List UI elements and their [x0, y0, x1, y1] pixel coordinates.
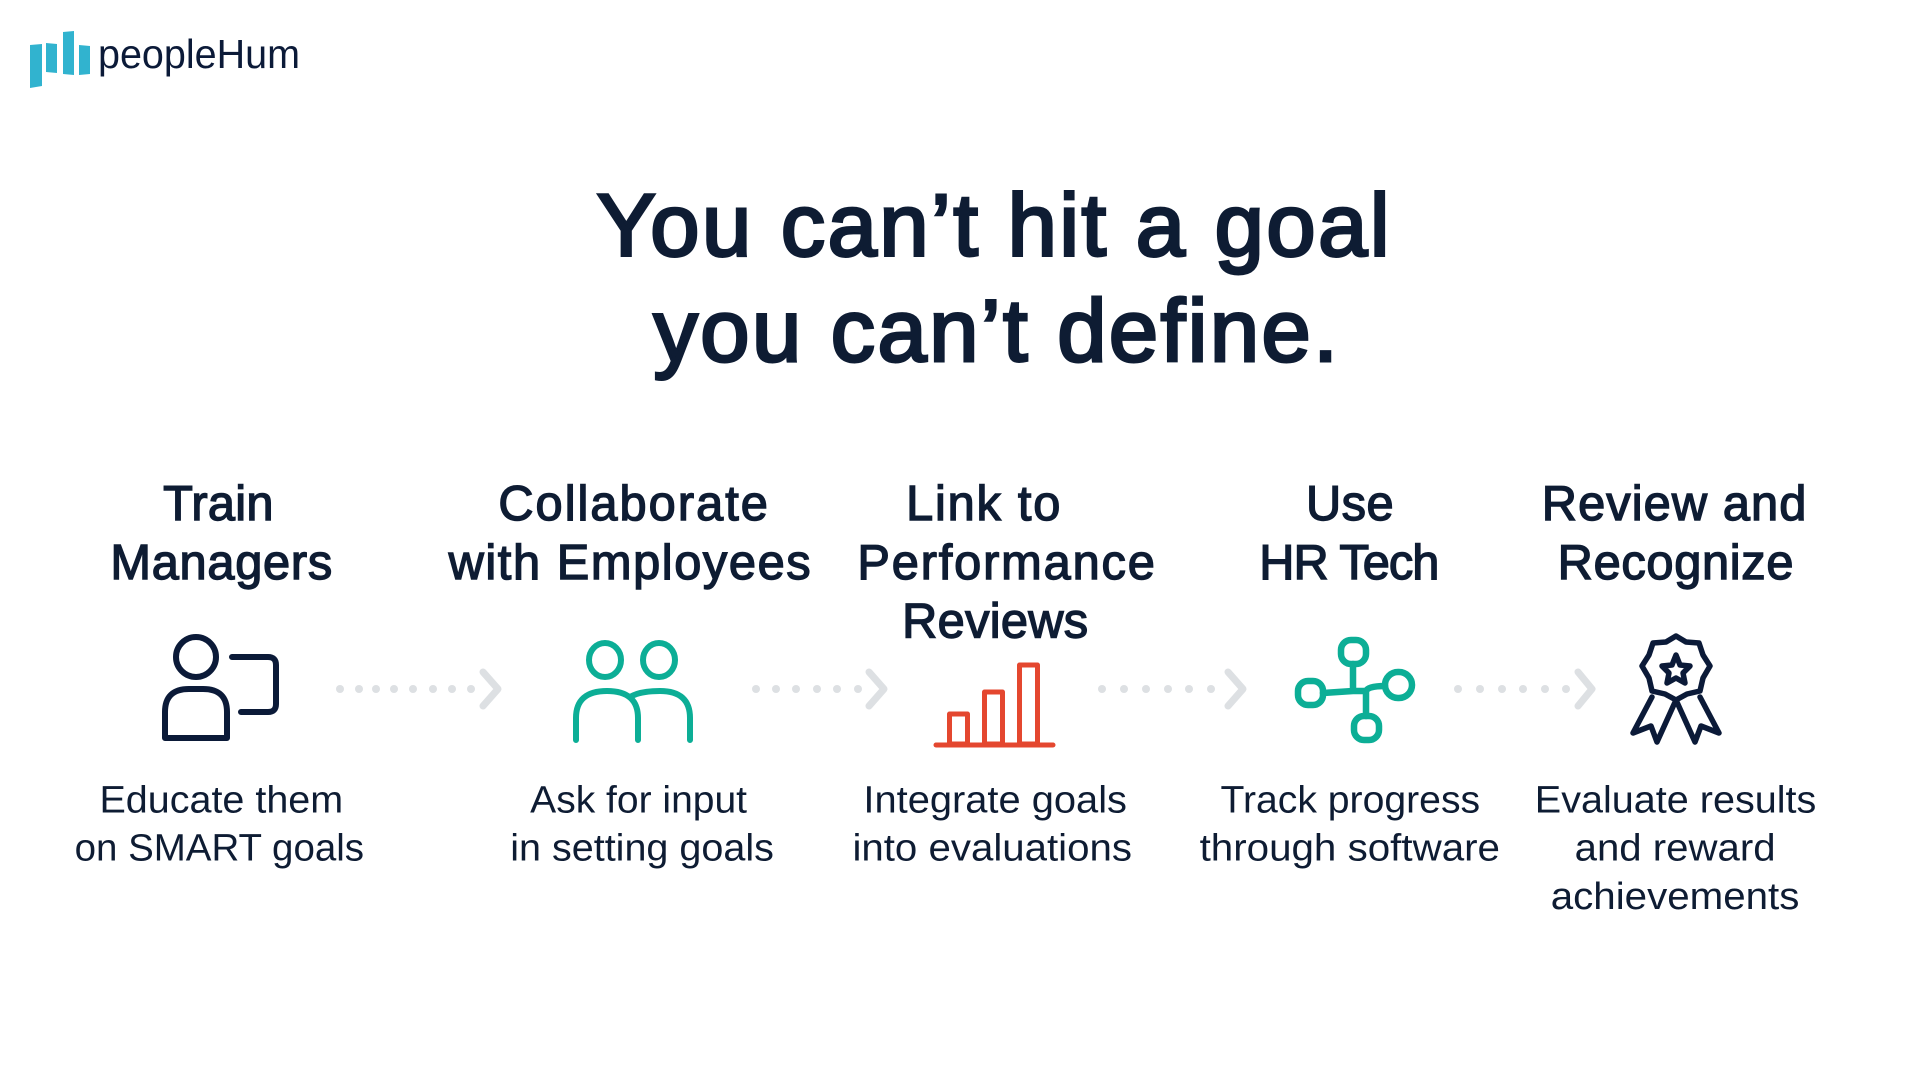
description: collaborate	[510, 780, 774, 869]
heading: link to performance reviews	[857, 477, 1155, 649]
icon: network nodes	[1298, 640, 1412, 740]
description: train managers	[75, 780, 364, 869]
description: train managers: on SMART goals	[75, 827, 364, 869]
icon: logo bars	[30, 31, 90, 88]
heading: review and recognize: Recognize	[1558, 536, 1793, 590]
heading: train managers	[110, 477, 332, 590]
title: you can’t define.	[654, 281, 1338, 380]
heading: use hr tech: HR Tech	[1259, 536, 1439, 590]
title: You can’t hit a goal	[597, 176, 1390, 275]
description: collaborate: Ask for input	[530, 780, 748, 822]
heading: use hr tech: Use	[1306, 477, 1394, 531]
heading: collaborate: with Employees	[448, 536, 811, 590]
arrow 4	[1454, 672, 1592, 706]
panel: train managers	[75, 477, 364, 869]
panel: link to performance reviews	[852, 477, 1155, 869]
heading: train managers: Managers	[110, 536, 332, 590]
description: hr tech	[1200, 780, 1500, 869]
description: review and recognize: Evaluate results	[1535, 780, 1816, 822]
panel: use hr tech	[1200, 477, 1500, 869]
heading: collaborate: Collaborate	[498, 477, 768, 531]
icon: two people	[576, 643, 690, 740]
icon: bar chart	[936, 665, 1053, 745]
heading: link to performance reviews: Reviews	[902, 595, 1088, 649]
description: review and recognize: and reward	[1575, 827, 1776, 869]
description: link to reviews: Integrate goals	[863, 780, 1127, 822]
heading: collaborate	[448, 477, 811, 590]
heading: review and recognize: Review and	[1542, 477, 1806, 531]
icon: award ribbon	[1633, 636, 1719, 742]
description: hr tech: Track progress	[1220, 780, 1480, 822]
heading: use hr tech	[1259, 477, 1439, 590]
description: link to reviews: into evaluations	[852, 827, 1132, 869]
panel: review and recognize	[1535, 477, 1816, 918]
heading: link to performance reviews: Performance	[857, 536, 1155, 590]
description: collaborate: in setting goals	[510, 827, 774, 869]
icon: person with board	[165, 637, 276, 738]
heading: train managers: Train	[163, 477, 274, 531]
logo wordmark: peopleHum	[98, 31, 300, 77]
title	[597, 176, 1390, 380]
arrow 2	[752, 672, 884, 706]
logo: peopleHum	[30, 31, 300, 88]
arrow 1	[336, 672, 498, 706]
description: review and recognize	[1535, 780, 1816, 918]
description: train managers: Educate them	[99, 780, 343, 822]
heading: review and recognize	[1542, 477, 1806, 590]
description: review and recognize: achievements	[1551, 876, 1799, 918]
description: link to reviews	[852, 780, 1132, 869]
description: hr tech: through software	[1200, 827, 1500, 869]
panel: collaborate with employees	[448, 477, 811, 869]
arrow 3	[1098, 672, 1243, 706]
heading: link to performance reviews: Link to	[906, 477, 1060, 531]
